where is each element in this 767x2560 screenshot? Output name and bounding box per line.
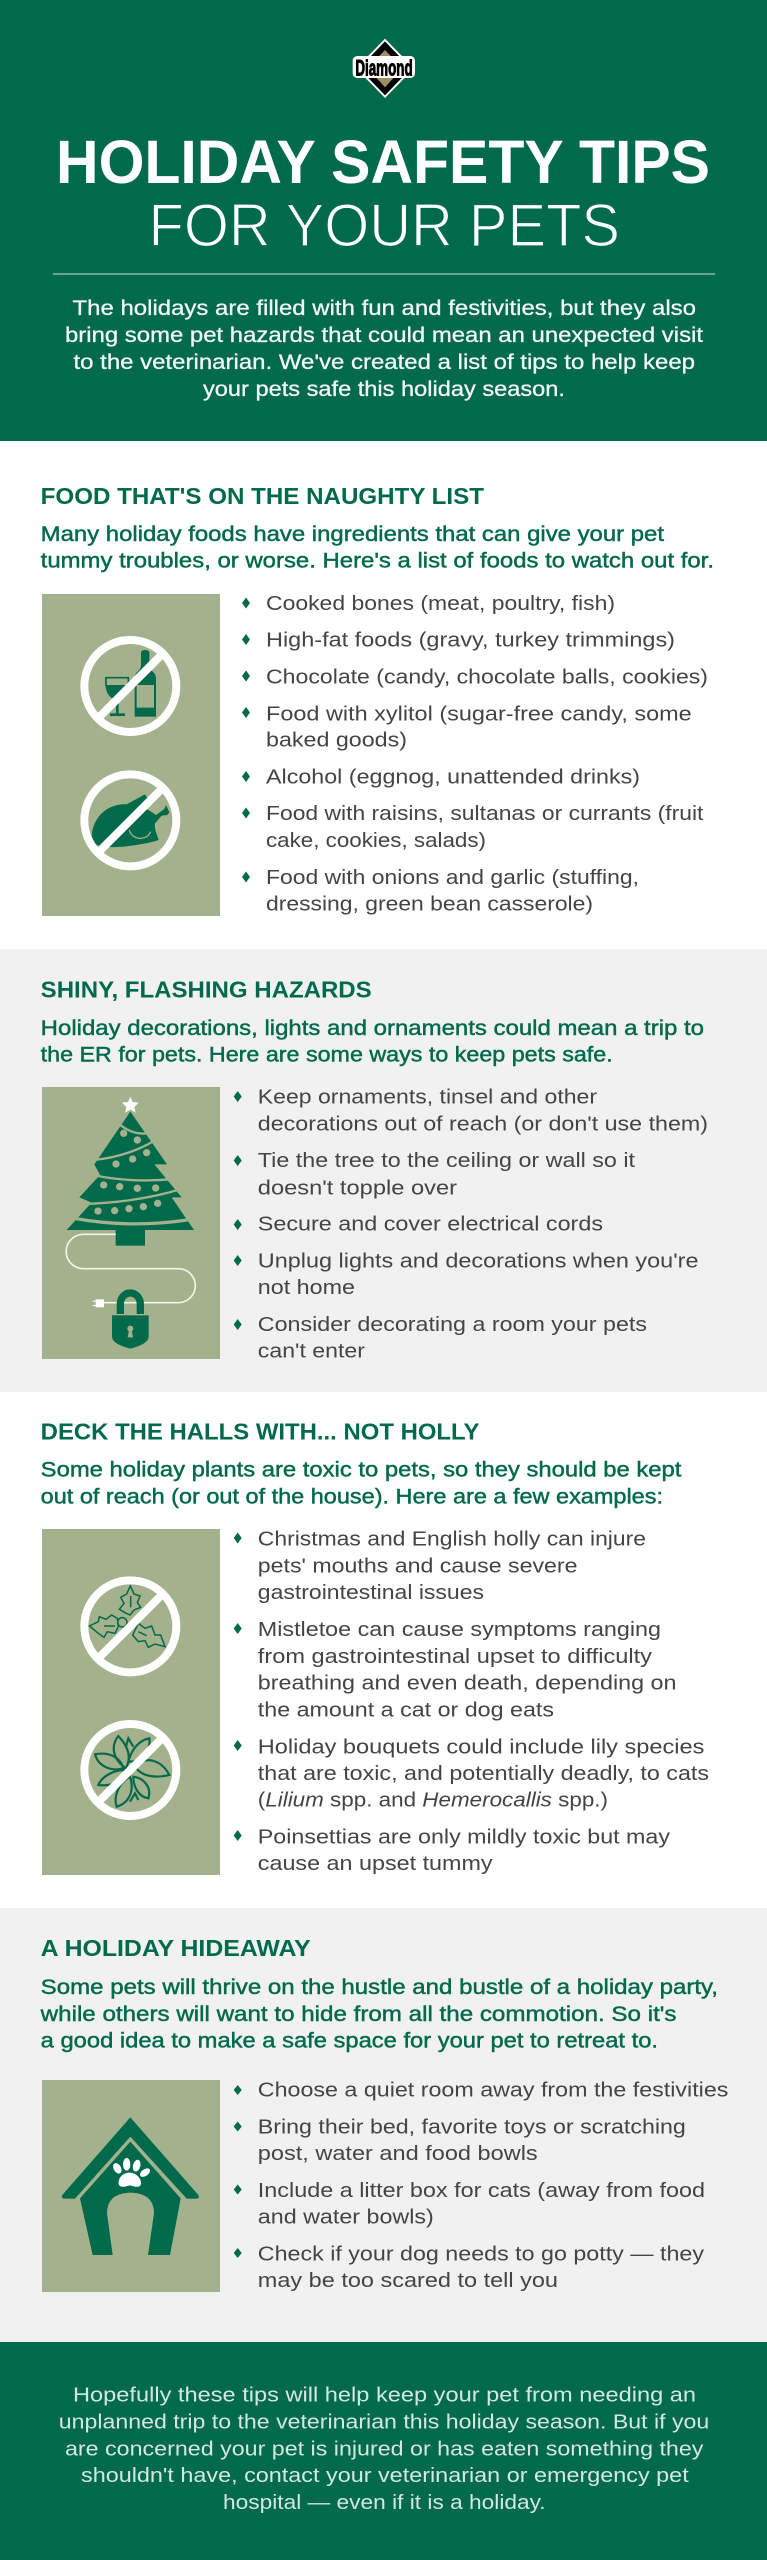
list: food: baked goods) xyxy=(266,729,407,752)
intro: food xyxy=(41,522,714,573)
list: plants: Holiday bouquets could include lily species xyxy=(258,1735,704,1758)
intro text: The holidays are filled with fun and festivities, but they also xyxy=(72,297,696,320)
list: decorations xyxy=(234,1086,708,1363)
list: hideaway: Check if your dog needs to go potty — they xyxy=(258,2243,705,2266)
icon panel: dog house xyxy=(42,2080,220,2292)
list: plants: cause an upset tummy xyxy=(258,1852,493,1875)
title xyxy=(56,128,710,259)
list: hideaway xyxy=(234,2078,728,2292)
list: decorations: Keep ornaments, tinsel and other xyxy=(258,1086,597,1109)
list: decorations: Secure and cover electrical cords xyxy=(258,1213,603,1236)
icon panel: food xyxy=(42,594,220,916)
panel: header xyxy=(0,0,767,441)
logo: Diamond xyxy=(353,39,415,98)
footer text: are concerned your pet is injured or has eaten something they xyxy=(65,2438,704,2461)
icon: no holly xyxy=(84,1580,176,1672)
list: plants xyxy=(234,1528,709,1875)
intro text: your pets safe this holiday season. xyxy=(203,378,565,401)
list: hideaway: Choose a quiet room away from the festivities xyxy=(258,2078,728,2102)
list: hideaway: may be too scared to tell you xyxy=(258,2269,558,2292)
list: hideaway: Bring their bed, favorite toys or scratching xyxy=(258,2116,686,2139)
intro: decorations: Holiday decorations, lights and ornaments could mean a trip to xyxy=(41,1016,704,1040)
intro: hideaway: a good idea to make a safe space for your pet to retreat to. xyxy=(41,2028,658,2052)
intro text: bring some pet hazards that could mean an unexpected visit xyxy=(65,324,703,347)
list: plants: the amount a cat or dog eats xyxy=(258,1698,554,1721)
list: hideaway: Include a litter box for cats (away from food xyxy=(258,2179,705,2202)
intro: decorations: the ER for pets. Here are some ways to keep pets safe. xyxy=(41,1043,613,1067)
list: decorations: doesn't topple over xyxy=(258,1176,457,1199)
intro: hideaway: while others will want to hide from all the commotion. So it's xyxy=(40,2002,676,2026)
icon: no wine xyxy=(84,640,176,732)
footer text: unplanned trip to the veterinarian this holiday season. But if you xyxy=(59,2411,709,2434)
heading: hideaway: A HOLIDAY HIDEAWAY xyxy=(41,1935,311,1961)
panel: footer xyxy=(0,2342,767,2560)
icon: no turkey xyxy=(84,774,176,866)
intro text: to the veterinarian. We've created a list of tips to help keep xyxy=(74,351,695,374)
intro: plants: out of reach (or out of the house). Here are a few examples: xyxy=(41,1485,663,1509)
list: plants: breathing and even death, depending on xyxy=(258,1671,676,1694)
list: food: High-fat foods (gravy, turkey trimmings) xyxy=(266,629,675,652)
list: plants: pets' mouths and cause severe xyxy=(258,1555,578,1578)
list: hideaway: post, water and food bowls xyxy=(258,2142,538,2165)
logo: Diamond: Diamond xyxy=(355,55,413,80)
list: plants: Poinsettias are only mildly toxic but may xyxy=(258,1825,671,1848)
icon: no poinsettia xyxy=(84,1724,176,1816)
list: hideaway: and water bowls) xyxy=(258,2206,434,2229)
heading: food: FOOD THAT'S ON THE NAUGHTY LIST xyxy=(41,483,485,509)
intro: food: Many holiday foods have ingredients that can give your pet xyxy=(41,522,664,546)
panel: decorations xyxy=(0,949,767,1392)
list: food: Food with xylitol (sugar-free candy, some xyxy=(266,703,692,726)
panel: food xyxy=(0,441,767,949)
list: food: dressing, green bean casserole) xyxy=(266,893,593,916)
panel: hideaway xyxy=(0,1908,767,2342)
list: decorations: Unplug lights and decorations when you're xyxy=(258,1250,698,1273)
list: plants: that are toxic, and potentially deadly, to cats xyxy=(258,1762,709,1785)
list: decorations: not home xyxy=(258,1276,355,1299)
list: food: cake, cookies, salads) xyxy=(266,829,486,852)
list: food: Alcohol (eggnog, unattended drinks) xyxy=(266,766,640,789)
heading: plants: DECK THE HALLS WITH... NOT HOLLY xyxy=(41,1418,480,1444)
footer text: hospital — even if it is a holiday. xyxy=(223,2491,546,2514)
icon: paw print xyxy=(111,2158,152,2187)
intro: hideaway xyxy=(40,1975,718,2052)
list: plants: Christmas and English holly can injure xyxy=(258,1528,646,1551)
icon panel: plants xyxy=(42,1529,220,1875)
list: decorations: Consider decorating a room your pets xyxy=(258,1313,647,1336)
list: plants: from gastrointestinal upset to difficulty xyxy=(258,1645,653,1668)
title: FOR YOUR PETS xyxy=(148,192,620,259)
heading: decorations: SHINY, FLASHING HAZARDS xyxy=(41,977,372,1003)
icon: dog house xyxy=(62,2117,199,2255)
intro: decorations xyxy=(41,1016,704,1067)
intro: hideaway: Some pets will thrive on the hustle and bustle of a holiday party, xyxy=(41,1975,718,1999)
list: food: Cooked bones (meat, poultry, fish) xyxy=(266,592,615,615)
footer text xyxy=(59,2384,709,2514)
icon panel: tree xyxy=(42,1087,220,1359)
list: food xyxy=(242,592,708,916)
intro: plants: Some holiday plants are toxic to pets, so they should be kept xyxy=(41,1458,681,1482)
list: decorations: Tie the tree to the ceiling or wall so it xyxy=(258,1149,635,1172)
list: plants: (Lilium spp. and Hemerocallis spp.) xyxy=(258,1789,608,1812)
panel: plants xyxy=(0,1392,767,1908)
footer text: Hopefully these tips will help keep your pet from needing an xyxy=(73,2384,696,2407)
list: food: Food with raisins, sultanas or currants (fruit xyxy=(266,802,704,825)
list: decorations: decorations out of reach (or don't use them) xyxy=(258,1112,708,1135)
title: HOLIDAY SAFETY TIPS xyxy=(56,128,710,197)
intro: plants xyxy=(41,1458,681,1509)
intro text xyxy=(65,297,703,401)
list: food: Chocolate (candy, chocolate balls, cookies) xyxy=(266,665,708,688)
footer text: shouldn't have, contact your veterinarian or emergency pet xyxy=(81,2464,689,2487)
icon: padlock xyxy=(112,1293,149,1349)
intro: food: tummy troubles, or worse. Here's a list of foods to watch out for. xyxy=(41,549,714,573)
list: plants: gastrointestinal issues xyxy=(258,1581,484,1604)
list: plants: Mistletoe can cause symptoms ranging xyxy=(258,1618,661,1641)
list: decorations: can't enter xyxy=(258,1340,365,1363)
icon: christmas tree and cord xyxy=(66,1097,195,1307)
list: food: Food with onions and garlic (stuffing, xyxy=(266,866,639,889)
